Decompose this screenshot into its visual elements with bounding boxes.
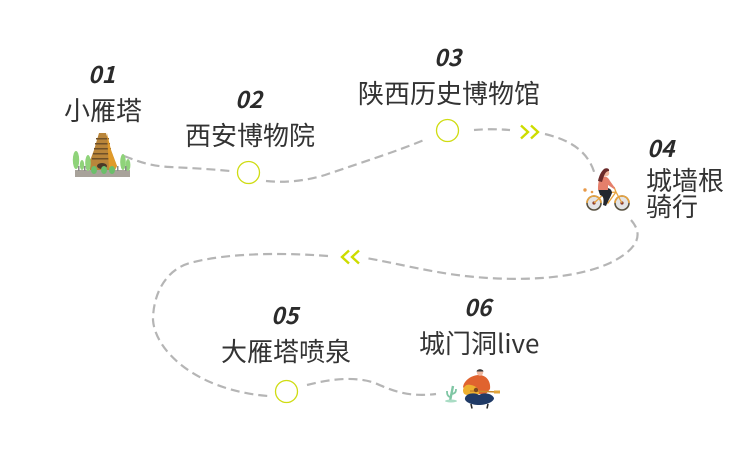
number 06: 06 <box>464 289 495 323</box>
stop 03 <box>358 39 540 142</box>
marker 05 <box>276 380 298 402</box>
dashed route: arrow to cyclist <box>545 134 595 175</box>
number 05: 05 <box>271 297 301 331</box>
icon: pagoda <box>73 133 130 177</box>
stop 01 <box>64 56 142 177</box>
dashed route: stop 05 to guitarist <box>307 379 436 395</box>
dashed route: tower to stop 02 <box>124 156 230 171</box>
marker 03 <box>436 120 458 142</box>
arrow: right chevrons <box>521 126 538 138</box>
label 大雁塔喷泉: 大雁塔喷泉 <box>221 332 351 369</box>
label 城墙根 骑行: 城墙根 <box>646 161 724 198</box>
dashed route: left arrow around to stop 05 <box>153 254 328 396</box>
stop 06 <box>419 289 539 408</box>
stop 04 <box>583 130 724 224</box>
stop 04: 骑行 <box>646 187 698 224</box>
stop 05 <box>221 297 351 402</box>
number 03: 03 <box>434 39 464 73</box>
stop 02 <box>185 81 315 184</box>
dashed route: stop 02 to stop 03 <box>266 140 424 182</box>
number 01: 01 <box>88 56 116 90</box>
number 04: 04 <box>647 130 677 164</box>
label 城门洞live: 城门洞live <box>419 324 539 361</box>
icon: cyclist <box>583 168 629 210</box>
dashed route: cyclist to left arrow <box>366 220 638 279</box>
dashed route: stop 03 to arrow <box>474 128 510 131</box>
icon: guitarist <box>445 369 500 408</box>
number 02: 02 <box>235 81 265 115</box>
arrow: left chevrons <box>342 250 359 264</box>
label 陕西历史博物馆: 陕西历史博物馆 <box>358 74 540 111</box>
label 小雁塔: 小雁塔 <box>64 91 142 128</box>
label 西安博物院: 西安博物院 <box>185 116 315 153</box>
marker 02 <box>238 162 260 184</box>
